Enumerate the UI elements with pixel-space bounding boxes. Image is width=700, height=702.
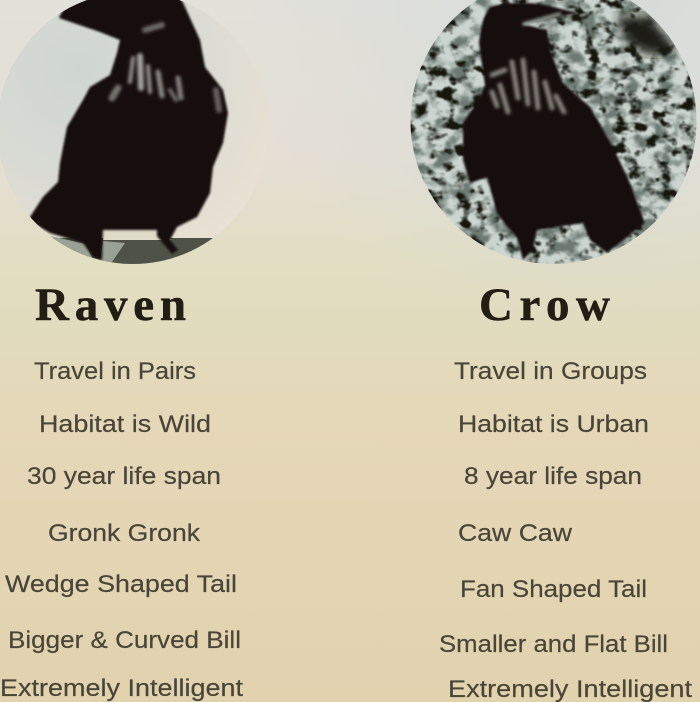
raven throat feathers bbox=[112, 25, 219, 110]
raven traits list bbox=[0, 358, 243, 702]
trait: travel: Travel in Pairs bbox=[34, 358, 196, 385]
trait: life span: 8 year life span bbox=[464, 463, 642, 490]
trait: habitat: Habitat is Urban bbox=[458, 411, 649, 438]
trait: intelligence: Extremely Intelligent bbox=[0, 675, 243, 702]
trait: bill: Smaller and Flat Bill bbox=[439, 631, 668, 658]
trait: habitat: Habitat is Wild bbox=[39, 411, 211, 438]
photo: raven bbox=[0, 0, 238, 264]
crow beak and neck feathers bbox=[492, 14, 564, 112]
heading: Raven: Raven bbox=[35, 279, 186, 331]
trait: tail: Wedge Shaped Tail bbox=[5, 571, 237, 598]
crow traits list bbox=[439, 358, 692, 702]
raven silhouette bbox=[28, 0, 228, 260]
trait: bill: Bigger & Curved Bill bbox=[8, 627, 241, 654]
trait: tail: Fan Shaped Tail bbox=[460, 576, 647, 603]
trait: call: Caw Caw bbox=[458, 520, 573, 547]
trait: life span: 30 year life span bbox=[27, 463, 221, 490]
heading: Crow: Crow bbox=[479, 279, 610, 331]
trait: travel: Travel in Groups bbox=[454, 358, 647, 385]
crow silhouette bbox=[463, 3, 645, 260]
trait: call: Gronk Gronk bbox=[48, 520, 201, 547]
photo: crow bbox=[410, 0, 698, 264]
